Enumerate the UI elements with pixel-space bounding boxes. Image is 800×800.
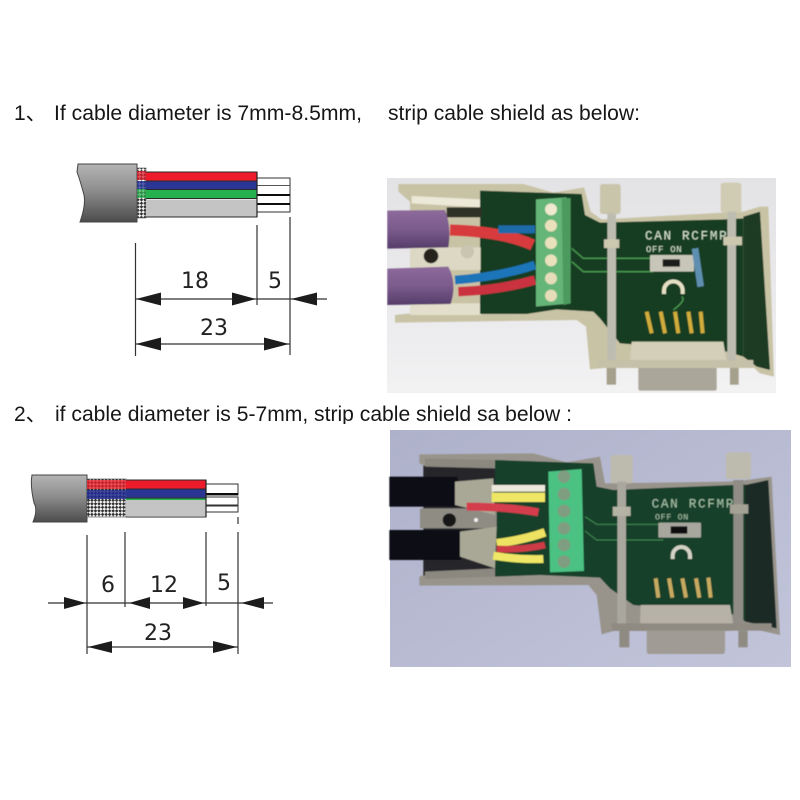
heading: step 1 instruction: strip cable shield as below: [388,102,640,125]
thumb screws [611,455,633,483]
D-sub connector [638,367,717,391]
heading: step 2 instruction: if cable diameter is 5-7mm, strip cable shield sa below : [55,403,572,426]
dimension labels [101,571,231,646]
photo: connector wired with 7mm-8.5mm purple cable: OFF ON [646,245,682,255]
PCB silkscreen: CAN RCFMP [645,228,728,243]
wires [492,478,545,498]
resistor [695,248,701,287]
dimension labels: 5 [217,571,231,596]
photo: connector wired with 7mm-8.5mm purple cable [387,178,776,393]
dimension labels: 23 [144,621,172,646]
center plate [420,508,497,528]
dimension labels [181,269,282,341]
green terminal block [548,469,584,572]
PCB [495,460,745,622]
dimension labels: 18 [181,269,209,294]
dimension labels: 23 [200,316,228,341]
diagram: cable strip dimensions for 7mm-8.5mm cable [77,164,327,356]
metal housing [395,184,774,377]
PCB [480,191,743,357]
metal housing [419,453,780,635]
gold pins [656,578,711,598]
PCB silkscreen: CAN RCFMP [652,497,735,512]
shadow behind cables [447,207,482,217]
dimension labels: 12 [150,573,178,598]
foil shields [455,478,495,515]
photo: connector wired with 5-7mm black cable: OFF ON [655,513,689,523]
gold pins [647,312,703,333]
dimension lines [135,217,327,356]
thumb screws [600,184,621,214]
PCB traces [572,248,683,310]
dimension lines [48,517,273,654]
PCB traces [585,517,663,540]
D-sub connector [647,629,725,654]
dimension labels: 6 [101,573,115,598]
black cables [389,477,458,507]
green terminal block [536,197,571,307]
screw hole plate [410,247,481,270]
slide switch [650,255,694,272]
heading: step 2 instruction: 2、 [14,403,47,426]
dimension labels: 5 [268,269,282,294]
photo: connector wired with 5-7mm black cable [389,430,791,667]
diagram: cable strip dimensions for 5-7mm cable [31,475,273,654]
cables [387,210,449,249]
heading: step 1 instruction: 1、 [14,102,47,125]
U pad [673,547,690,559]
dark cavity behind cables [423,466,497,576]
heading: step 1 instruction [14,102,640,125]
slide switch [658,523,701,538]
heading: step 1 instruction: If cable diameter is 7mm-8.5mm, [54,102,362,125]
U pad [664,281,683,294]
